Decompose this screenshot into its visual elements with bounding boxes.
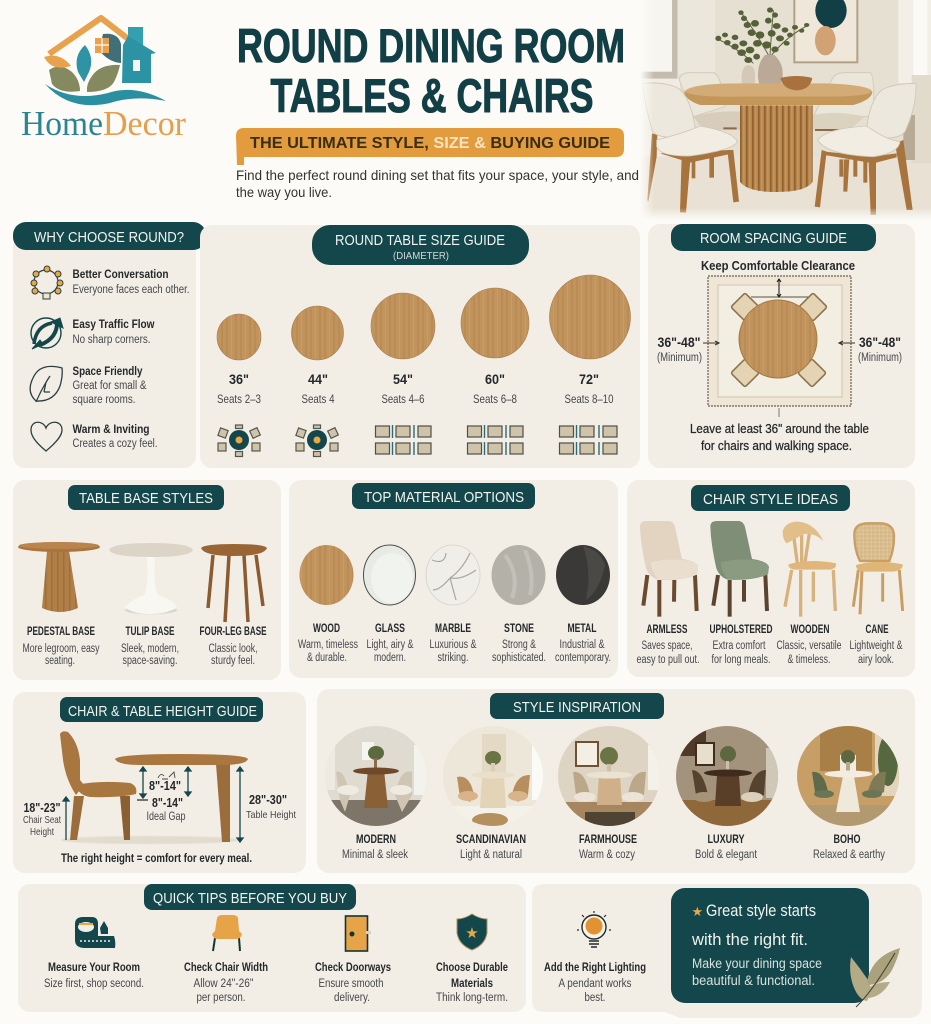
style labels: Light & natural: [460, 849, 522, 861]
base labels: TULIP BASE: [126, 626, 175, 638]
side view table: [115, 754, 248, 842]
style labels: MODERN: [356, 834, 396, 846]
size labels: 72": [579, 371, 599, 387]
chair labels: CANE: [866, 624, 889, 636]
label: right clearance: [858, 334, 902, 364]
base labels: [22, 626, 267, 667]
base labels: sturdy feel.: [211, 655, 255, 667]
material labels: Strong &: [502, 639, 536, 651]
gap measure: 8"-14": [152, 795, 183, 810]
base labels: Classic look,: [208, 643, 258, 655]
chair labels: WOODEN: [790, 624, 830, 636]
tulip table: [109, 543, 193, 614]
text: space friendly: Space Friendly: [72, 364, 143, 378]
material labels: Industrial &: [560, 639, 605, 651]
gap measure: [146, 772, 186, 823]
tip labels: delivery.: [334, 992, 370, 1004]
swatch: wood: [300, 545, 354, 605]
text: better conversation: [72, 267, 190, 296]
logo: Home: [21, 104, 103, 143]
tip labels: Think long-term.: [436, 992, 508, 1004]
icon: traffic flow arrows: [31, 318, 63, 349]
heading: materials: [352, 483, 535, 509]
seat height label: Height: [30, 826, 54, 838]
label: left clearance: [657, 334, 702, 364]
material labels: Warm, timeless: [298, 639, 358, 651]
material labels: contemporary.: [555, 652, 611, 664]
label: left clearance: 36"-48": [658, 334, 700, 350]
seat height label: 18"-23": [24, 800, 60, 815]
heading: size guide: (DIAMETER): [393, 250, 449, 262]
intro text: the way you live.: [236, 184, 332, 200]
text: better conversation: Everyone faces each other.: [72, 284, 190, 296]
swatch: stone: [492, 545, 546, 605]
size labels: Seats 6–8: [473, 392, 517, 406]
heading: height guide: CHAIR & TABLE HEIGHT GUIDE: [68, 703, 257, 720]
seat height label: [23, 800, 61, 838]
tip labels: Measure Your Room: [48, 962, 140, 974]
photo: luxury: [676, 726, 779, 826]
chair labels: for long meals.: [712, 654, 770, 666]
size labels: [217, 371, 614, 406]
panel: why choose round: [13, 222, 206, 468]
callout: ★: [692, 904, 703, 919]
icon: shield: [457, 914, 487, 950]
swatch: metal: [556, 545, 610, 605]
hero photo: dining room: [640, 0, 931, 220]
panel: chair style ideas: [627, 480, 915, 677]
photo: farmhouse: [558, 726, 660, 826]
chair: armless: [640, 521, 698, 617]
heading: chair styles: CHAIR STYLE IDEAS: [703, 491, 838, 508]
four-leg table top: [201, 544, 267, 556]
heading: materials: TOP MATERIAL OPTIONS: [364, 489, 524, 506]
panel: lighting tip and callout: [532, 884, 922, 1018]
style labels: Relaxed & earthy: [813, 849, 885, 861]
tip labels: Materials: [451, 978, 493, 990]
chair: cane: [853, 523, 903, 614]
side view chair: [60, 731, 136, 840]
text: easy traffic flow: No sharp corners.: [72, 334, 150, 346]
tip labels: Check Chair Width: [184, 962, 268, 974]
lighting label: best.: [584, 992, 606, 1004]
heading: why choose round: WHY CHOOSE ROUND?: [34, 229, 184, 246]
callout: with the right fit.: [691, 931, 808, 949]
base labels: seating.: [45, 655, 75, 667]
panel: round table size guide: [200, 225, 640, 468]
size labels: Seats 8–10: [564, 392, 614, 406]
size labels: 54": [393, 371, 413, 387]
material labels: Light, airy &: [366, 639, 414, 651]
icon: door: [346, 916, 371, 951]
lighting label: A pendant works: [558, 978, 632, 990]
icon: light bulb: [577, 911, 611, 947]
tip labels: Ensure smooth: [318, 978, 384, 990]
panel: chair and table height guide: [13, 692, 306, 873]
swatch: marble: [426, 545, 480, 605]
heading: base styles: TABLE BASE STYLES: [79, 490, 213, 507]
text: warm and inviting: Creates a cozy feel.: [72, 438, 158, 450]
chair labels: [636, 624, 903, 666]
panel: room spacing guide: [648, 224, 915, 468]
label: right clearance: 36"-48": [859, 334, 901, 350]
swatch: glass: [364, 545, 416, 605]
pedestal table: [18, 542, 100, 612]
text: space friendly: square rooms.: [72, 394, 136, 406]
room plan diagram: [703, 276, 855, 417]
tip labels: [44, 962, 508, 1004]
style labels: SCANDINAVIAN: [456, 834, 526, 846]
heading: room spacing: ROOM SPACING GUIDE: [700, 230, 847, 247]
icon: people around a table: [31, 266, 63, 299]
heading: quick tips: QUICK TIPS BEFORE YOU BUY: [153, 890, 347, 907]
seating icons: round layouts: [218, 425, 338, 456]
material labels: MARBLE: [435, 623, 471, 635]
callout: Make your dining space: [692, 956, 822, 971]
label: right clearance: (Minimum): [858, 352, 902, 364]
icon: heart: [31, 422, 62, 451]
style labels: BOHO: [834, 834, 861, 846]
heading: why choose round: [13, 222, 206, 250]
subtitle banner: [236, 128, 624, 165]
heading: style inspiration: STYLE INSPIRATION: [513, 699, 641, 716]
table height label: [246, 792, 296, 821]
text: warm and inviting: [72, 422, 158, 450]
material labels: striking.: [438, 652, 468, 664]
icon: shield: ★: [465, 925, 479, 942]
material labels: sophisticated.: [492, 652, 546, 664]
size labels: Seats 4–6: [382, 392, 425, 406]
text: keep comfortable clearance: Keep Comfortable Clearance: [701, 258, 855, 273]
style labels: LUXURY: [708, 834, 745, 846]
material labels: METAL: [568, 623, 596, 635]
chair: wooden: [783, 522, 836, 617]
panel: style inspiration: [317, 689, 915, 873]
text: clearance note: Leave at least 36" around the table: [690, 422, 869, 436]
photo: modern: [325, 726, 427, 826]
panel: table base styles: [13, 480, 281, 680]
label: left clearance: (Minimum): [657, 352, 702, 364]
text: better conversation: Better Conversation: [72, 267, 168, 281]
intro text: [236, 167, 639, 200]
tip labels: Check Doorways: [315, 962, 391, 974]
photo: scandinavian: [443, 726, 543, 827]
intro text: Find the perfect round dining set that fits your space, your style, and: [236, 167, 639, 183]
title: [237, 19, 625, 122]
size labels: 60": [485, 371, 505, 387]
tip labels: Choose Durable: [436, 962, 508, 974]
photo: boho: [797, 726, 899, 826]
tip labels: Allow 24"-26": [194, 978, 254, 990]
material labels: & durable.: [307, 652, 347, 664]
panel: quick tips: [18, 884, 526, 1012]
four-leg table: [208, 555, 263, 622]
heading: size guide: ROUND TABLE SIZE GUIDE: [335, 232, 505, 249]
heading: room spacing: [671, 224, 876, 251]
base labels: FOUR-LEG BASE: [200, 626, 267, 638]
style labels: Warm & cozy: [579, 849, 635, 861]
chair labels: & timeless.: [788, 654, 830, 666]
floor shadow: [60, 836, 240, 844]
lighting label: Add the Right Lighting: [544, 962, 646, 974]
heading: size guide: [312, 225, 529, 265]
icon: leaf sprig: [850, 948, 900, 1007]
size labels: Seats 4: [302, 392, 335, 406]
seating icons: grid layouts: [376, 425, 617, 455]
text: space friendly: [72, 364, 147, 406]
table height label: Table Height: [246, 809, 296, 821]
logo: Decor: [103, 104, 186, 143]
lighting label: [544, 962, 646, 1004]
icon: tape measure: [75, 917, 115, 948]
tip labels: per person.: [196, 992, 246, 1004]
size labels: 36": [229, 371, 249, 387]
text: clearance note: for chairs and walking space.: [701, 439, 852, 453]
style labels: FARMHOUSE: [579, 834, 637, 846]
material labels: Luxurious &: [430, 639, 477, 651]
text: space friendly: Great for small &: [72, 380, 147, 392]
chair labels: Saves space,: [642, 640, 692, 652]
callout: [671, 888, 869, 1003]
chair: upholstered: [710, 521, 769, 617]
base labels: More legroom, easy: [22, 643, 100, 655]
base labels: PEDESTAL BASE: [27, 626, 95, 638]
table height label: 28"-30": [249, 792, 287, 807]
height note: The right height = comfort for every meal.: [61, 851, 252, 865]
subtitle banner: THE ULTIMATE STYLE, SIZE & BUYING GUIDE: [250, 135, 610, 152]
text: easy traffic flow: Easy Traffic Flow: [72, 317, 155, 331]
seat height label: Chair Seat: [23, 814, 61, 826]
size labels: Seats 2–3: [217, 392, 261, 406]
text: easy traffic flow: [72, 317, 155, 346]
table tops: [217, 275, 630, 360]
height arrows: [63, 767, 243, 842]
tip labels: Size first, shop second.: [44, 978, 144, 990]
heading: quick tips: [144, 884, 356, 910]
title: TABLES & CHAIRS: [270, 69, 594, 122]
base labels: Sleek, modern,: [121, 643, 179, 655]
size labels: 44": [308, 371, 328, 387]
material labels: WOOD: [313, 623, 340, 635]
chair labels: Classic, versatile: [776, 640, 842, 652]
heading: height guide: [60, 697, 263, 722]
chair labels: UPHOLSTERED: [710, 624, 772, 636]
title: ROUND DINING ROOM: [237, 19, 625, 72]
text: clearance note: [690, 422, 869, 453]
heading: style inspiration: [490, 693, 664, 719]
chair labels: ARMLESS: [646, 624, 688, 636]
panel: top material options: [289, 480, 618, 678]
base labels: space-saving.: [122, 655, 178, 667]
style labels: [342, 834, 885, 861]
gap measure: Ideal Gap: [146, 809, 186, 823]
material labels: modern.: [374, 652, 406, 664]
logo: [21, 18, 186, 143]
heading: base styles: [68, 485, 224, 510]
callout: Great style starts: [706, 902, 816, 920]
chair labels: Lightweight &: [850, 640, 903, 652]
heading: chair styles: [691, 485, 850, 511]
material labels: GLASS: [375, 623, 405, 635]
icon: chair: [212, 915, 242, 951]
text: warm and inviting: Warm & Inviting: [72, 422, 150, 436]
chair labels: easy to pull out.: [636, 654, 700, 666]
chair labels: airy look.: [858, 654, 894, 666]
style labels: Bold & elegant: [695, 849, 758, 861]
callout: beautiful & functional.: [692, 973, 815, 988]
gap measure: 8"-14": [149, 778, 181, 793]
material labels: STONE: [504, 623, 534, 635]
material labels: [298, 623, 611, 664]
icon: leaf: [30, 366, 62, 402]
style labels: Minimal & sleek: [342, 849, 408, 861]
chair labels: Extra comfort: [712, 640, 766, 652]
